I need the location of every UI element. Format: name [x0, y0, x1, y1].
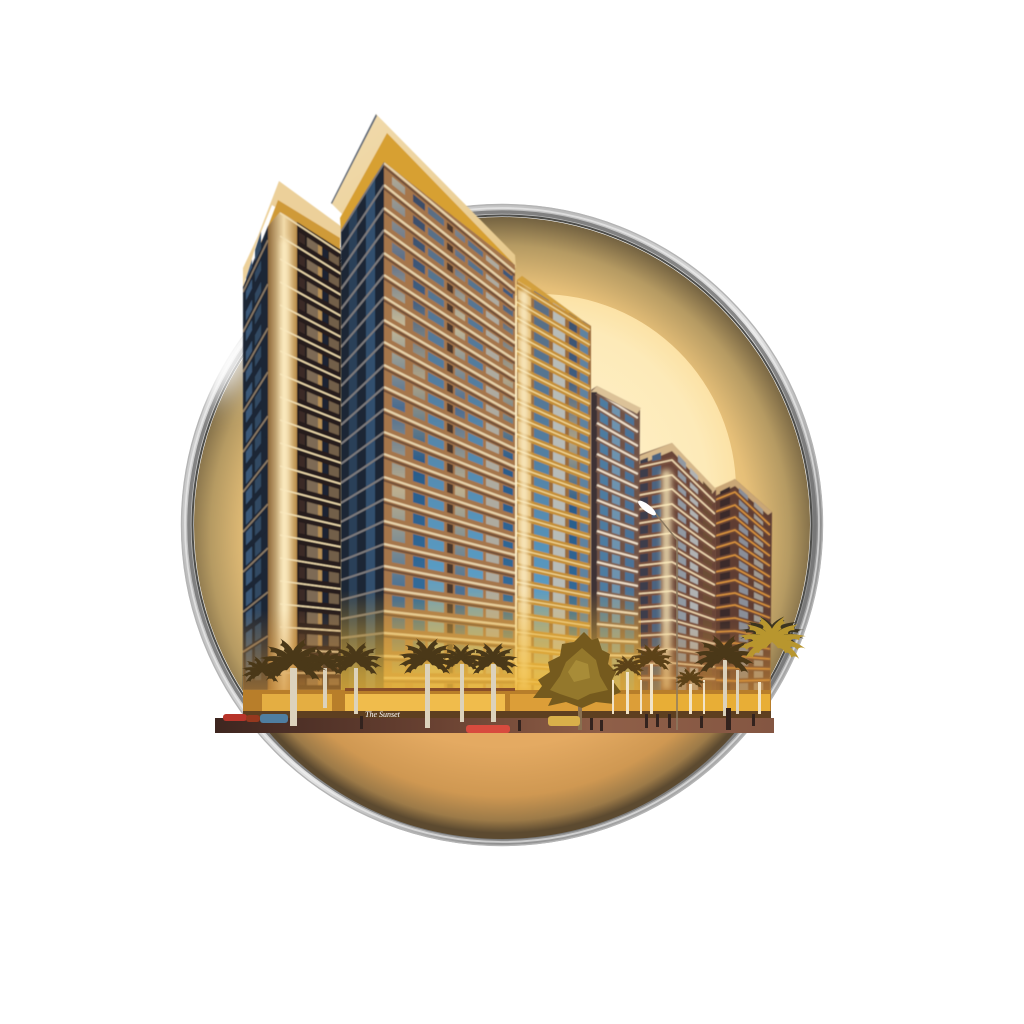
roof of building A	[243, 181, 342, 287]
tree	[533, 632, 621, 730]
palm crowns	[241, 633, 755, 684]
disc lower tan area	[262, 720, 742, 839]
floor bands across the gold pier and bays of building A	[280, 213, 341, 673]
building C gold tower	[517, 270, 591, 700]
sign: The Sunset: The Sunset	[365, 710, 401, 719]
warm lit podium glow, left and right towers	[243, 610, 771, 718]
building E far tower	[634, 443, 716, 700]
cars	[223, 714, 580, 733]
front yellow palm	[737, 615, 807, 660]
palm trunks	[290, 660, 739, 728]
dark window bays of building A	[297, 222, 341, 690]
left dark face of building A	[243, 226, 268, 690]
building D mid tower	[591, 386, 641, 700]
right tan face of building B	[384, 162, 515, 710]
pale sun circle	[344, 294, 736, 686]
building A left back tower	[243, 181, 342, 700]
badge: silver ring and golden disc	[182, 204, 822, 846]
building B main front tower	[331, 114, 516, 710]
white haze behind left tower	[167, 255, 257, 395]
gold pier of building A	[268, 212, 297, 690]
shopfront band	[243, 688, 771, 718]
warm lit podium glow, main towers	[341, 590, 641, 718]
left dark face of building B	[341, 162, 384, 710]
roof of building B	[331, 114, 516, 274]
background small palms and trunks right	[611, 643, 761, 714]
pedestrians	[360, 708, 755, 731]
ground road strip	[215, 718, 774, 733]
street light	[636, 498, 677, 730]
building F far right tower	[715, 479, 772, 700]
